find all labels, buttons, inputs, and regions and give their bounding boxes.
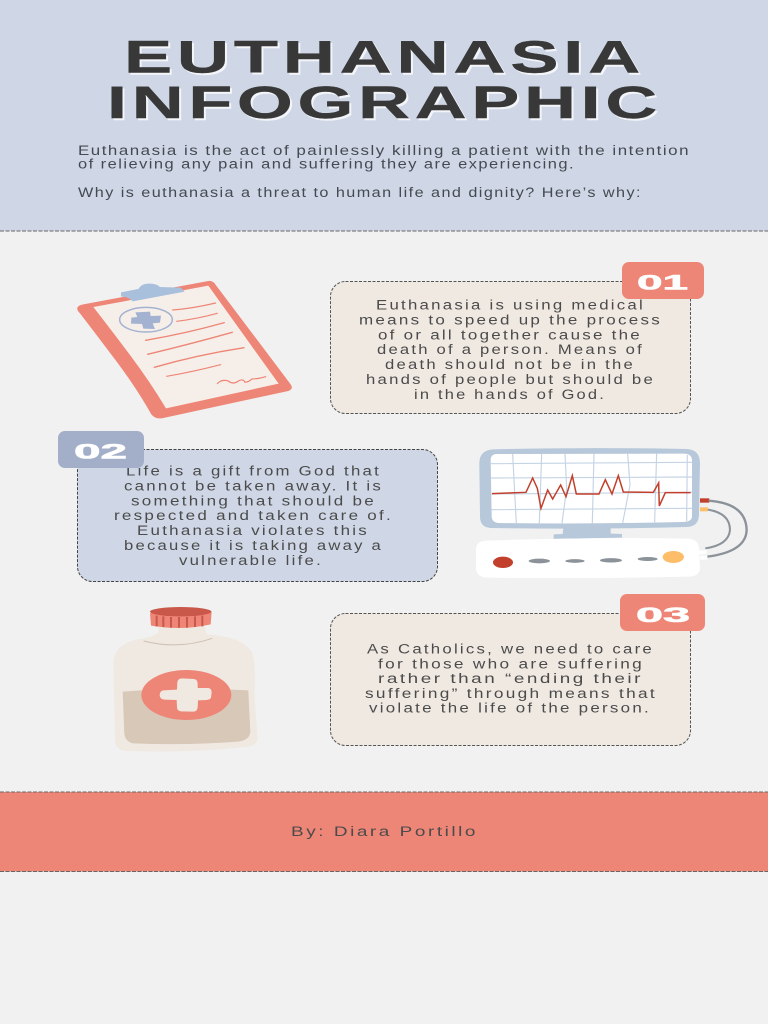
panel: point 2 [58,431,438,582]
text: point 1 [359,298,662,402]
text: point 3: violate the life of the person. [369,700,651,716]
badge: 03 [620,594,705,631]
panel: point 3 [330,594,705,746]
text: point 3 [365,642,657,716]
text: point 1: in the hands of God. [414,387,606,402]
panel: point 1 [330,262,704,414]
badge: 02 [58,431,144,468]
text: point 2: Euthanasia violates this [137,523,369,538]
text: point 2: because it is taking away a [124,538,383,553]
text: point 2: cannot be taken away. It is [124,478,383,494]
icon: clipboard [77,281,292,418]
badge: 03: 03 [636,604,690,627]
text: point 1: Euthanasia is using medical [376,298,645,312]
badge: 02: 02 [74,440,127,464]
title: INFOGRAPHIC [107,77,662,128]
author credit: By: Diara Portillo [291,824,478,839]
text: point 2: respected and taken care of. [114,508,393,523]
title: EUTHANASIA [126,34,647,84]
intro text: of relieving any pain and suffering they are experiencing. [78,156,575,172]
text: point 3: rather than “ending their [378,671,643,686]
text: point 3: suffering” through means that [365,686,657,701]
panel: header [0,0,768,231]
text: point 1: death of a person. Means of [377,342,644,357]
title: INFOGRAPHIC [109,79,664,130]
panel: footer [0,792,768,872]
intro text: Euthanasia is the act of painlessly killing a patient with the intention [78,143,690,158]
text: point 1: hands of people but should be [366,372,655,387]
text: point 1: death should not be in the [385,357,635,372]
text: point 3: for those who are suffering [378,656,644,672]
badge: 01 [622,262,704,299]
title [107,32,664,130]
text: point 2 [114,464,393,568]
text: point 2: Life is a gift from God that [126,464,381,478]
badge: 01: 01 [637,272,689,294]
text: point 3: As Catholics, we need to care [367,642,654,656]
text: point 1: of or all together cause the [378,328,642,342]
icon: heart monitor [476,448,747,578]
text: point 2: something that should be [131,494,376,508]
icon: medicine bottle [113,607,258,752]
text: point 1: means to speed up the process [359,312,662,328]
text: point 2: vulnerable life. [179,553,323,568]
title: EUTHANASIA [124,32,645,82]
intro text [78,143,690,200]
intro text: Why is euthanasia a threat to human life and dignity? Here’s why: [78,185,642,200]
